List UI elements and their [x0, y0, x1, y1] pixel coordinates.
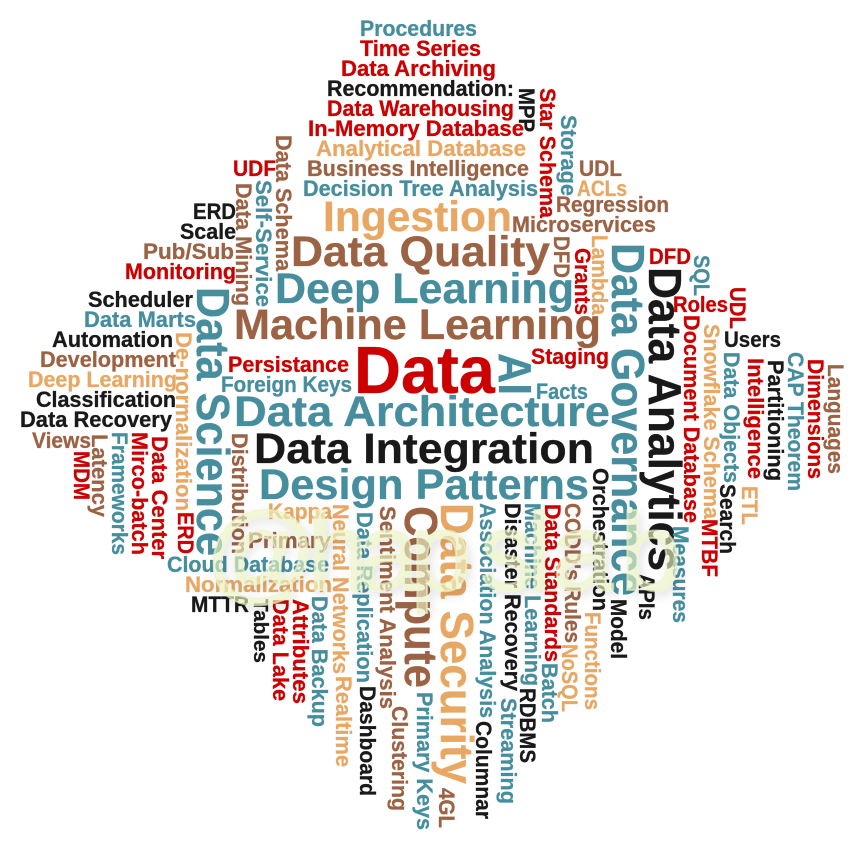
word: Persistance: Persistance — [228, 352, 349, 377]
word: CODD's Rules: CODD's Rules — [560, 503, 585, 643]
word: Mirco-batch: Mirco-batch — [127, 432, 152, 555]
word: Data Recovery: Data Recovery — [20, 407, 173, 432]
word: MTTR: MTTR — [191, 592, 249, 617]
word: Frameworks: Frameworks — [107, 432, 132, 555]
word: Kappa: Kappa — [268, 499, 333, 524]
word: Model: Model — [606, 599, 631, 659]
word: MTBF: MTBF — [697, 519, 722, 577]
word: Latency: Latency — [87, 434, 112, 518]
word: Foreign Keys: Foreign Keys — [221, 372, 352, 397]
word: Decision Tree Analysis: Decision Tree Analysis — [303, 176, 538, 201]
word: Data Mining: Data Mining — [231, 183, 256, 306]
word: Pub/Sub: Pub/Sub — [143, 239, 234, 264]
horizontal words: centre small — [167, 344, 609, 617]
word: UDF: UDF — [233, 156, 276, 181]
word: Languages: Languages — [823, 364, 848, 474]
word: Columnar: Columnar — [471, 721, 496, 819]
word: Dashboard: Dashboard — [355, 686, 380, 796]
word: Scale: Scale — [180, 219, 236, 244]
word: Classification: Classification — [36, 387, 176, 412]
word: Partitioning: Partitioning — [763, 360, 788, 481]
word: MDM: MDM — [69, 451, 94, 500]
word: Self-Service: Self-Service — [251, 180, 276, 307]
word: Neural Networks: Neural Networks — [328, 504, 353, 674]
word: Data Center: Data Center — [147, 436, 172, 559]
word: Clustering: Clustering — [387, 706, 412, 811]
word: Ingestion: Ingestion — [323, 193, 512, 241]
word: AI: AI — [489, 353, 541, 395]
word: Batch: Batch — [537, 663, 562, 723]
word: Procedures: Procedures — [360, 16, 477, 41]
word: Association Analysis: Association Analysis — [475, 503, 500, 718]
word: MPP: MPP — [514, 88, 539, 132]
word: Data Science: Data Science — [187, 287, 239, 556]
word: Primary Keys: Primary Keys — [412, 692, 437, 830]
word: ERD: ERD — [193, 199, 236, 224]
word: UDL: UDL — [579, 156, 622, 181]
word: Data Quality: Data Quality — [291, 228, 550, 276]
horizontal words: right side — [512, 156, 781, 352]
word: Attributes: Attributes — [288, 599, 313, 704]
word: Data Schema: Data Schema — [271, 135, 296, 272]
vertical words: left — [69, 135, 296, 559]
word: Machine Learning: Machine Learning — [520, 503, 545, 686]
word: Star Schema: Star Schema — [535, 88, 560, 219]
word: NoSQL: NoSQL — [557, 644, 582, 712]
word: Data: Data — [354, 333, 496, 408]
horizontal words: top stack — [303, 16, 538, 201]
word: Regression: Regression — [556, 192, 669, 217]
word: Functions: Functions — [580, 612, 605, 710]
word: Automation: Automation — [52, 327, 173, 352]
word: Sentiment Analysis: Sentiment Analysis — [375, 506, 400, 709]
word: 4GL: 4GL — [434, 788, 459, 828]
word: Users: Users — [724, 327, 781, 352]
word: Normalization: Normalization — [185, 572, 332, 597]
word: Deep Learning: Deep Learning — [275, 265, 574, 313]
word: Data Warehousing: Data Warehousing — [327, 96, 514, 121]
word: De-normalization: De-normalization — [171, 332, 196, 511]
word: ETL: ETL — [737, 486, 762, 525]
word: Search: Search — [715, 484, 740, 554]
word: Machine Learning: Machine Learning — [234, 301, 601, 349]
word: Orchestration: Orchestration — [588, 468, 613, 611]
vertical words: bottom — [249, 468, 693, 830]
word: Staging: Staging — [531, 344, 609, 369]
word: Lambda: Lambda — [587, 235, 612, 316]
word: Primary: Primary — [248, 528, 332, 553]
word: Measures: Measures — [668, 526, 693, 623]
word: DFD: DFD — [649, 244, 691, 269]
word: Data Lake: Data Lake — [268, 599, 293, 701]
word: Recommendation:: Recommendation: — [327, 76, 514, 101]
word: ERD: ERD — [173, 512, 198, 554]
word: Document Database: Document Database — [679, 315, 704, 523]
watermark: @hapslab — [205, 491, 681, 614]
word: Scheduler: Scheduler — [88, 287, 193, 312]
word: Time Series: Time Series — [360, 36, 481, 61]
word: Views: Views — [32, 428, 91, 453]
word: Storage: Storage — [556, 115, 581, 196]
word: Snowflake Schema: Snowflake Schema — [699, 324, 724, 520]
word: Design Patterns: Design Patterns — [259, 461, 589, 509]
word: Deep Learning: Deep Learning — [28, 367, 177, 392]
word: SQL: SQL — [689, 255, 714, 296]
word: Data Objects: Data Objects — [719, 352, 744, 483]
word: Data Governance: Data Governance — [602, 243, 654, 596]
word: Data Marts: Data Marts — [84, 307, 196, 332]
word: UDL: UDL — [725, 287, 750, 329]
word: Data Archiving: Data Archiving — [341, 56, 496, 81]
word: Microservices: Microservices — [512, 212, 656, 237]
word: Grants: Grants — [570, 248, 595, 315]
word: ACLs: ACLs — [577, 176, 627, 201]
horizontal words: large centre — [234, 193, 610, 509]
word: Data Backup: Data Backup — [307, 596, 332, 727]
vertical words: top right — [514, 88, 848, 596]
word: CAP Theorem: CAP Theorem — [783, 352, 808, 491]
word: Roles: Roles — [673, 292, 728, 317]
word: Monitoring: Monitoring — [125, 259, 236, 284]
word: Tables: Tables — [249, 599, 271, 663]
word: Analytical Database: Analytical Database — [316, 136, 526, 161]
word: Disaster Recovery: Disaster Recovery — [500, 503, 525, 692]
word: Data Analytics: Data Analytics — [639, 267, 691, 571]
word: Streaming: Streaming — [496, 698, 521, 804]
word: Business Intelligence: Business Intelligence — [307, 156, 529, 181]
word: Compute: Compute — [395, 506, 447, 688]
word: Data Security: Data Security — [431, 503, 483, 784]
word: Data Integration: Data Integration — [254, 425, 594, 473]
word: Distribution: Distribution — [227, 433, 252, 554]
word: Facts: Facts — [536, 379, 588, 404]
word: APIs: APIs — [634, 574, 659, 620]
word: Data Architecture: Data Architecture — [234, 388, 610, 436]
word: Intelligence: Intelligence — [743, 358, 768, 479]
horizontal words: left side — [20, 156, 276, 453]
word: Dimensions: Dimensions — [803, 359, 828, 479]
word: DFD: DFD — [549, 236, 574, 278]
word: Realtime: Realtime — [331, 676, 356, 767]
word: In-Memory Database: In-Memory Database — [308, 116, 524, 141]
word: Data Replication: Data Replication — [352, 512, 377, 683]
word: Data Standards: Data Standards — [540, 504, 565, 662]
word: Cloud Database: Cloud Database — [167, 552, 329, 577]
word: Development: Development — [40, 347, 177, 372]
word: RDBMS: RDBMS — [515, 688, 540, 763]
